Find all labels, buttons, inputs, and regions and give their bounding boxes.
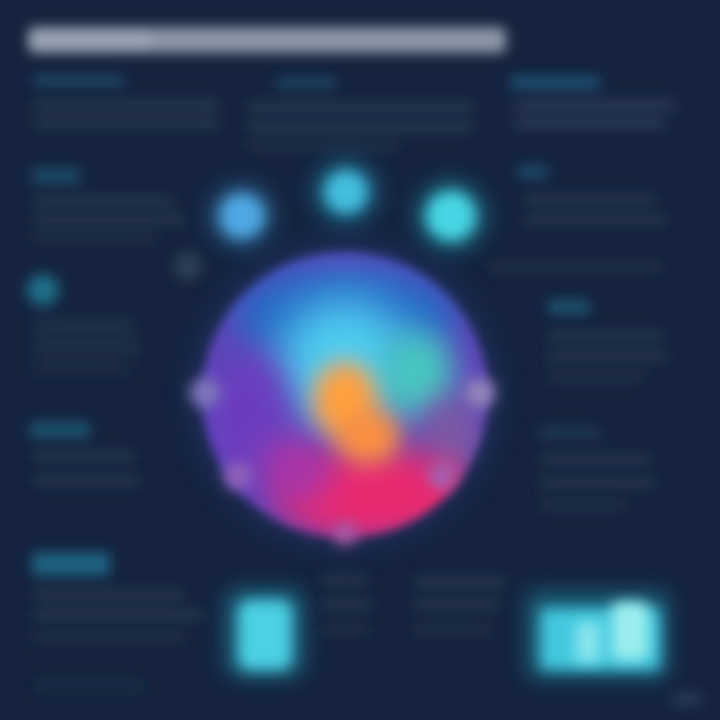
panel: top right text: [510, 76, 675, 128]
panel: bottom left text: [32, 552, 204, 690]
panel: right text block 1: [490, 165, 665, 271]
panel: left text block 1: [32, 168, 184, 242]
panel: right text block 3: [540, 428, 655, 509]
chart: bright bars: [525, 590, 670, 680]
main colour disc: [193, 243, 497, 547]
disc node: lower right: [429, 463, 455, 489]
icon: cyan circle: [310, 156, 382, 228]
panel: left text block 3: [30, 422, 139, 485]
icon: blue circle: [206, 180, 278, 252]
disc node: right: [465, 378, 495, 408]
disc node: lower left: [224, 462, 252, 490]
icon: teal circle: [413, 178, 489, 254]
title: [28, 27, 506, 53]
disc node: upper left label: [174, 252, 202, 280]
panel: top left text: [34, 75, 219, 128]
panel: bottom centre text: [322, 575, 505, 634]
disc colours: [195, 245, 495, 545]
disc node: left: [190, 378, 220, 408]
disc node: bottom: [334, 523, 356, 545]
disc glow: [193, 243, 497, 547]
panel: right text block 2: [548, 300, 668, 381]
icon: phone: [224, 587, 306, 679]
corner mark: [672, 692, 702, 706]
panel: top centre text: [248, 78, 473, 150]
panel: left text block 2: [27, 274, 139, 371]
